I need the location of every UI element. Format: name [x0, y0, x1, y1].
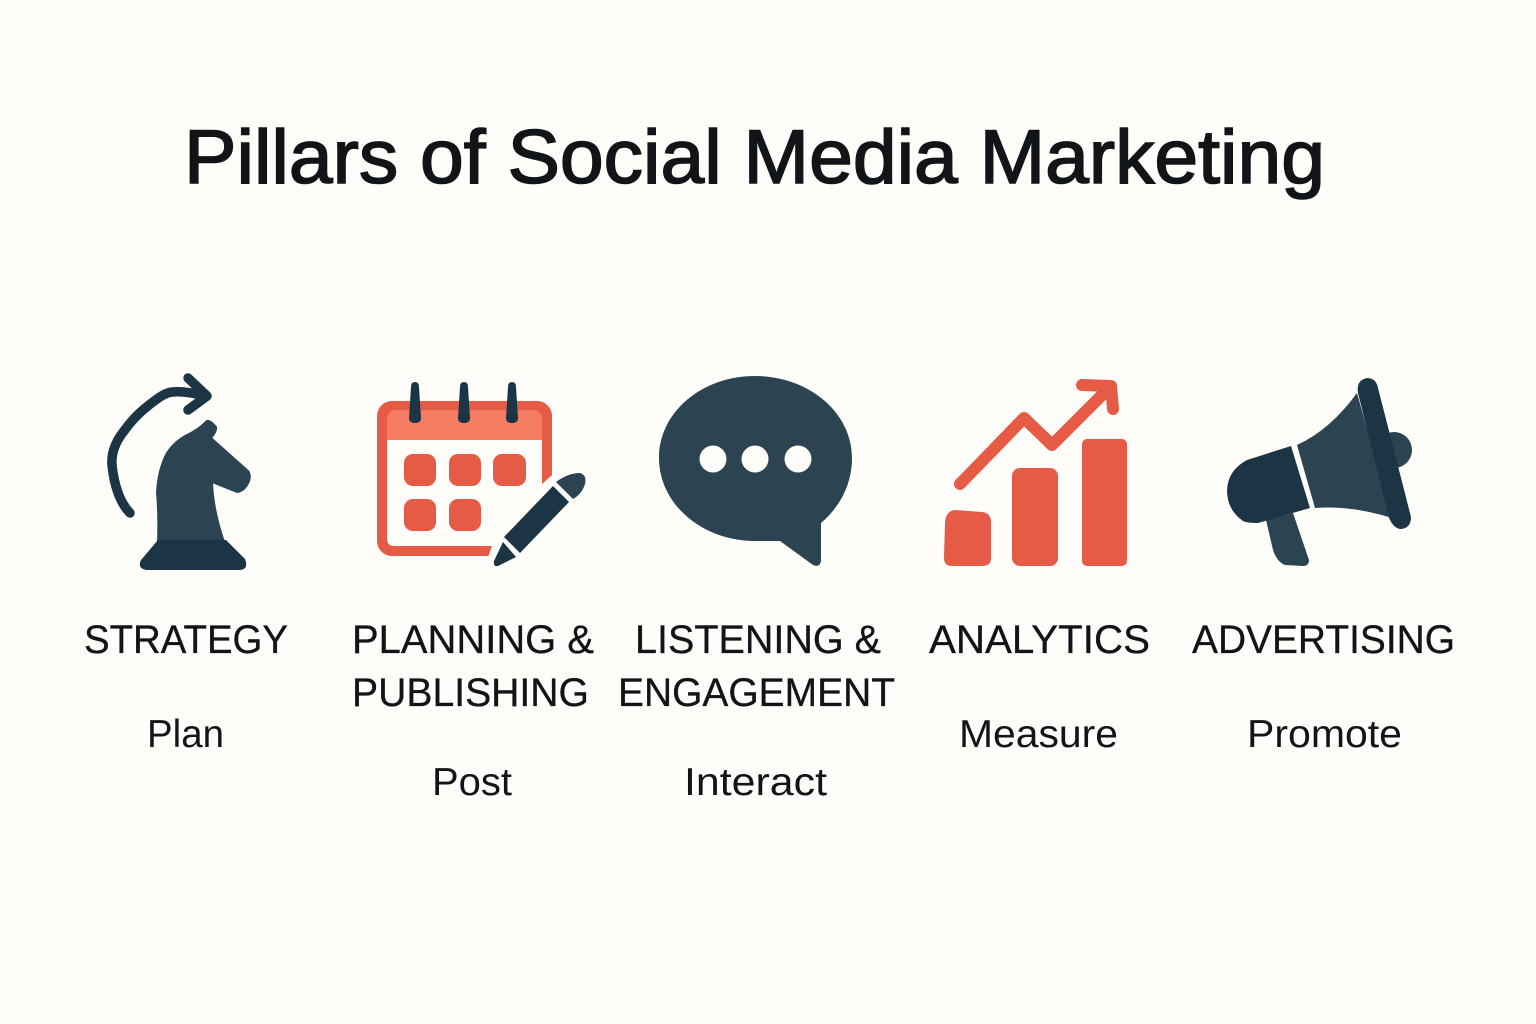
heading: planning and publishing: [352, 618, 594, 715]
icon: megaphone: [1227, 378, 1412, 566]
heading: planning and publishing: PUBLISHING: [352, 671, 589, 715]
date squares: [404, 454, 526, 531]
binder rings: [409, 382, 518, 423]
panel: listening and engagement: [618, 376, 895, 804]
curved arrow: [112, 378, 207, 513]
panel: planning and publishing: [352, 382, 594, 804]
rim: [1358, 378, 1411, 529]
knight body: [157, 421, 250, 542]
label: post: Post: [432, 761, 512, 804]
label: plan: Plan: [147, 713, 224, 756]
panel: analytics: [929, 385, 1150, 756]
icon: calendar with pen: [377, 382, 585, 566]
label: promote: Promote: [1247, 713, 1402, 756]
label: interact: Interact: [684, 761, 827, 804]
heading: advertising: ADVERTISING: [1192, 618, 1455, 662]
pen: [494, 473, 585, 566]
heading: listening and engagement: ENGAGEMENT: [618, 671, 895, 715]
heading: listening and engagement: [618, 618, 895, 715]
cone: [1297, 393, 1392, 518]
heading: planning and publishing: PLANNING &: [352, 618, 594, 662]
knight base: [140, 540, 246, 570]
icon: bar chart with rising arrow: [944, 385, 1127, 566]
icon: chess knight with arrow: [112, 378, 250, 570]
heading: strategy: STRATEGY: [84, 618, 288, 662]
calendar frame: [377, 401, 552, 556]
heading: listening and engagement: LISTENING &: [635, 618, 881, 662]
heading: analytics: ANALYTICS: [929, 618, 1150, 662]
bubble: [659, 376, 852, 566]
pen clearance: [487, 468, 560, 560]
trend arrow: [960, 385, 1113, 484]
bars: [944, 439, 1127, 566]
panel: strategy: [84, 378, 288, 756]
label: measure: Measure: [959, 713, 1118, 756]
dots: [700, 446, 812, 472]
panel: advertising: [1192, 378, 1455, 756]
handle: [1266, 513, 1309, 566]
back cap: [1376, 432, 1412, 468]
calendar header: [387, 410, 542, 440]
mouthpiece: [1227, 446, 1310, 523]
icon: speech bubble: [659, 376, 852, 566]
calendar page: [387, 440, 542, 546]
title: Pillars of Social Media Marketing: [184, 115, 1325, 200]
